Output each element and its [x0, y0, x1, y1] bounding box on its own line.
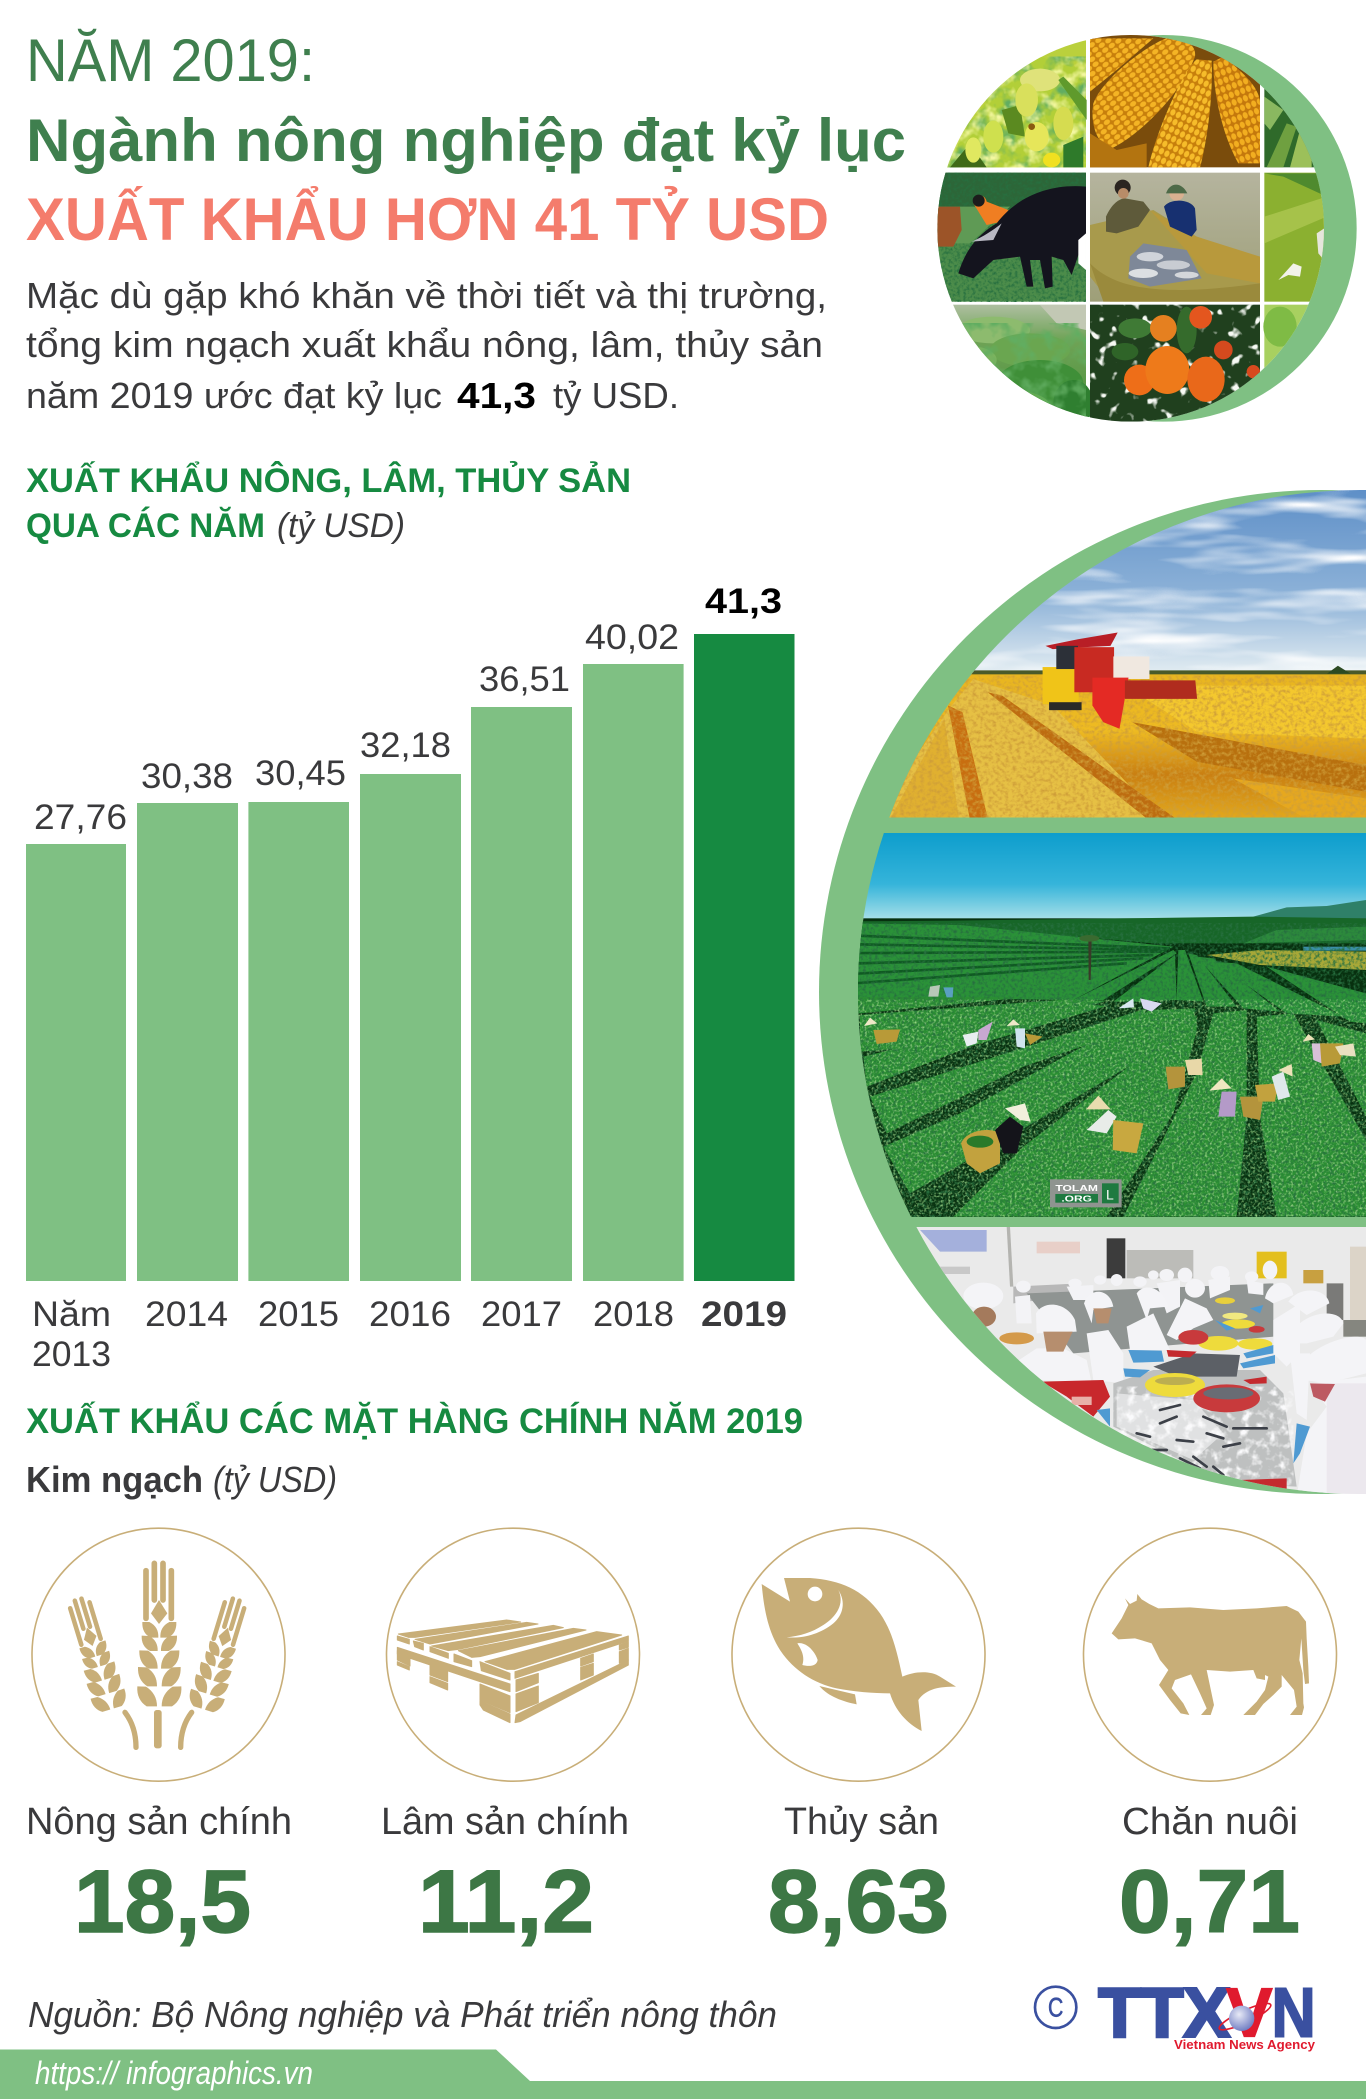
icon: cow	[1112, 1594, 1309, 1715]
wordmark	[1098, 1974, 1316, 2052]
label: Chăn nuôi	[1122, 1801, 1298, 1843]
year labels: Năm	[32, 1295, 111, 1334]
title line: year: NĂM 2019:	[26, 27, 315, 94]
year labels: 2017	[481, 1295, 562, 1334]
photo: green leaves	[1263, 305, 1327, 422]
watermark: tolam.org: .ORG	[1061, 1193, 1092, 1203]
watermark: tolam.org: L	[1106, 1186, 1114, 1202]
logo: TTXVN	[1035, 1974, 1316, 2052]
chart heading: (tỷ USD)	[277, 507, 405, 545]
wordmark: V	[1226, 1974, 1273, 2052]
panel: seafood	[732, 1528, 985, 1951]
value labels: 30,45	[255, 754, 346, 793]
icon circle	[1084, 1528, 1336, 1781]
pickers	[864, 985, 1356, 1173]
footer bar	[0, 2050, 1366, 2099]
panel: forest products	[381, 1528, 640, 1951]
photo: oranges	[1090, 305, 1260, 422]
year labels: 2015	[258, 1295, 339, 1334]
intro text block: 41,3	[457, 375, 536, 416]
photo: forest	[953, 304, 1090, 418]
value: 18,5	[74, 1851, 251, 1951]
footer url: https:// infographics.vn	[35, 2055, 313, 2091]
intro text block: tổng kim ngạch xuất khẩu nông, lâm, thủy sản	[26, 324, 823, 365]
section heading: main exports: XUẤT KHẨU CÁC MẶT HÀNG CHÍNH NĂM 2019	[26, 1401, 803, 1441]
intro text block: tỷ USD.	[553, 375, 679, 416]
bar chart: export 2013-2019	[26, 582, 794, 1374]
panel: livestock	[1084, 1528, 1336, 1951]
photo: rice terrace	[1264, 173, 1327, 302]
workers	[963, 1279, 1366, 1497]
gloves	[1097, 1305, 1310, 1463]
icon: pallet	[397, 1620, 628, 1723]
value labels: 27,76	[34, 798, 127, 837]
icon: fish	[762, 1578, 956, 1731]
year labels: 2013	[32, 1335, 111, 1374]
year labels: 2014	[145, 1295, 228, 1334]
green crescent	[970, 35, 1357, 422]
section heading: main exports	[26, 1401, 803, 1500]
bars	[26, 634, 794, 1281]
title line: main: Ngành nông nghiệp đạt kỷ lục	[26, 107, 906, 174]
source line: Nguồn: Bộ Nông nghiệp và Phát triển nông thôn	[28, 1994, 777, 2035]
crowd	[1015, 1261, 1277, 1323]
far rows	[800, 923, 1173, 1000]
year labels: 2016	[369, 1295, 451, 1334]
photo: rice harvester	[800, 480, 1366, 818]
copyright mark	[1035, 1987, 1076, 2028]
year labels: 2019	[701, 1295, 787, 1334]
value labels: 32,18	[360, 726, 451, 765]
title	[26, 27, 906, 253]
chart heading: XUẤT KHẨU NÔNG, LÂM, THỦY SẢN	[26, 461, 631, 500]
value: 8,63	[768, 1851, 949, 1951]
copyright mark: C	[1048, 1993, 1063, 2023]
value labels: 36,51	[479, 660, 570, 699]
photo: tea plantation	[800, 830, 1366, 1218]
value labels	[34, 582, 782, 837]
icon: wheat	[62, 1563, 254, 1748]
panel: photos on the right	[800, 480, 1366, 1500]
photo: rice ears	[937, 35, 1087, 167]
value labels: 30,38	[141, 757, 233, 796]
label: Thủy sản	[784, 1801, 939, 1843]
chart heading	[26, 461, 631, 545]
value labels: 40,02	[585, 618, 679, 657]
title line: highlight: XUẤT KHẨU HƠN 41 TỶ USD	[26, 186, 829, 253]
wordmark: TTX	[1098, 1974, 1230, 2052]
year labels: 2018	[593, 1295, 674, 1334]
photo mosaic circle	[930, 30, 1363, 430]
intro text block: Mặc dù gặp khó khăn về thời tiết và thị trường,	[26, 275, 827, 316]
near rows	[800, 997, 1366, 1217]
chart heading: QUA CÁC NĂM	[26, 507, 265, 545]
photo: seafood factory	[860, 1225, 1366, 1500]
watermark: tolam.org: TOLAM	[1055, 1183, 1098, 1193]
value: 0,71	[1119, 1851, 1300, 1951]
icon circle	[32, 1528, 285, 1781]
photo: fish harvest	[1090, 173, 1260, 302]
label: Nông sản chính	[26, 1801, 292, 1843]
mosaic photos	[937, 35, 1324, 422]
photo: corn cobs	[1090, 35, 1260, 167]
photo: green vegetables	[1264, 88, 1314, 168]
year labels	[32, 1295, 787, 1374]
section heading: main exports: Kim ngạch	[26, 1459, 203, 1500]
section heading: main exports: (tỷ USD)	[213, 1459, 337, 1500]
icon circle	[732, 1528, 985, 1781]
label: Lâm sản chính	[381, 1801, 629, 1843]
intro text block	[26, 275, 827, 416]
value labels: 41,3	[705, 582, 782, 621]
work table	[1113, 1370, 1297, 1487]
wordmark: N	[1272, 1974, 1316, 2052]
agency name: Vietnam News Agency	[1174, 2038, 1315, 2052]
watermark: tolam.org	[1050, 1179, 1122, 1207]
green ring	[819, 490, 1366, 1494]
icon circle	[386, 1528, 640, 1781]
photo: buffalo grazing	[937, 173, 1086, 302]
value: 11,2	[418, 1851, 594, 1951]
intro text block: năm 2019 ước đạt kỷ lục	[26, 375, 442, 416]
panel: farm products	[26, 1528, 292, 1951]
